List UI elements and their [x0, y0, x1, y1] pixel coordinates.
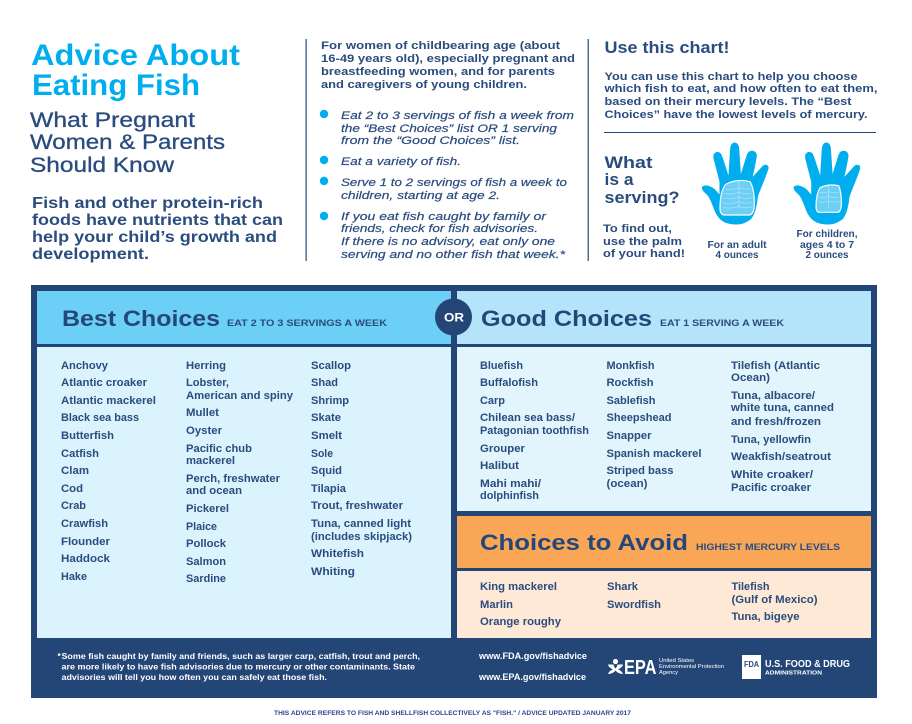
- list: best choices column 3: Smelt: [311, 430, 342, 442]
- list: best choices column 2: [186, 360, 293, 585]
- list: avoid column 1: Orange roughy: [480, 616, 561, 628]
- subheading: best choices frequency: EAT 2 TO 3 SERVINGS A WEEK: [227, 318, 387, 328]
- list: avoid column 2: [607, 581, 661, 611]
- intro paragraph: development.: [32, 246, 149, 263]
- list: best choices column 3: [311, 360, 412, 578]
- bullet: children: children, starting at age 2.: [341, 190, 500, 202]
- list: best choices column 3: Squid: [311, 465, 342, 477]
- list: best choices column 2: Sardine: [186, 573, 226, 585]
- subheading: mercury levels: HIGHEST MERCURY LEVELS: [696, 542, 840, 552]
- subheading: good choices frequency: EAT 1 SERVING A WEEK: [660, 318, 784, 328]
- list: best choices column 1: Flounder: [61, 536, 111, 548]
- bullet: servings per week: [320, 110, 574, 147]
- list: best choices column 3: Shad: [311, 377, 338, 389]
- bullet: family caught fish: serving and no other fish that week.*: [341, 249, 566, 261]
- panel: good choices: [457, 291, 871, 511]
- list: good choices column 1: Chilean sea bass/: [480, 412, 575, 424]
- title: Advice About: [31, 39, 240, 72]
- list: best choices column 1: Butterfish: [61, 430, 114, 442]
- list: best choices column 1: Crawfish: [61, 518, 108, 530]
- logo: EPA: [608, 656, 724, 679]
- list: best choices column 2: Perch, freshwater: [186, 473, 281, 485]
- list: best choices column 3: Sole: [311, 448, 333, 460]
- icon: or badge: [435, 298, 472, 336]
- list: good choices column 2: Monkfish: [606, 360, 654, 372]
- list: good choices column 3: and fresh/frozen: [731, 416, 821, 428]
- list: best choices column 2: Pollock: [186, 538, 227, 550]
- title block: [30, 39, 283, 263]
- list: avoid column 3: (Gulf of Mexico): [732, 594, 818, 606]
- caption: child serving: For children,: [796, 229, 858, 240]
- list: avoid column 2: Swordfish: [607, 599, 661, 611]
- list: good choices column 2: Rockfish: [606, 377, 654, 389]
- subtitle: Should Know: [30, 154, 175, 177]
- list: best choices column 3: Skate: [311, 412, 341, 424]
- logo: FDA: ADMINISTRATION: [765, 670, 822, 676]
- list: good choices column 1: Halibut: [480, 460, 519, 472]
- caption: adult serving: [708, 240, 767, 261]
- bullet: family caught fish: friends, check for fish advisories.: [341, 223, 538, 235]
- heading: what is a serving: serving?: [604, 188, 680, 207]
- list: best choices column 1: Black sea bass: [61, 412, 139, 424]
- caption: adult serving: For an adult: [708, 240, 767, 251]
- list: good choices column 1: Mahi mahi/: [480, 478, 541, 490]
- list: best choices column 3: Tilapia: [311, 483, 347, 495]
- intro paragraph: foods have nutrients that can: [32, 212, 283, 229]
- subtitle: What Pregnant: [30, 109, 195, 132]
- bullet: children: [320, 177, 567, 202]
- list: good choices column 3: Pacific croaker: [731, 482, 812, 494]
- list: best choices column 2: Plaice: [186, 521, 217, 533]
- bullet: variety: [320, 156, 461, 168]
- caption: adult serving: 4 ounces: [716, 250, 759, 261]
- list: best choices column 3: Tuna, canned light: [311, 518, 411, 530]
- list: good choices column 2: Striped bass: [606, 465, 674, 477]
- list: best choices column 3: Shrimp: [311, 395, 349, 407]
- audience text: [321, 40, 575, 91]
- list: good choices column 3: white tuna, canned: [730, 402, 834, 414]
- list: good choices column 1: Buffalofish: [480, 377, 538, 389]
- list: best choices column 2: Mullet: [186, 407, 219, 419]
- heading: what is a serving: is a: [604, 170, 634, 189]
- bullet: family caught fish: If there is no advisory, eat only one: [341, 236, 555, 248]
- palm instruction: use the palm: [603, 236, 682, 248]
- list: best choices column 1: Crab: [61, 500, 86, 512]
- panel: audience and advice: [320, 40, 575, 261]
- list: best choices column 2: Pacific chub: [186, 443, 252, 455]
- bullet: family caught fish: If you eat fish caught by family or: [341, 211, 547, 223]
- list: best choices column 2: Oyster: [186, 425, 223, 437]
- icon: adult hand: [703, 143, 768, 224]
- list: best choices column 2: Herring: [186, 360, 226, 372]
- heading: choices to avoid: Choices to Avoid: [480, 530, 688, 555]
- bullet: servings per week: Eat 2 to 3 servings of fish a week from: [341, 110, 574, 122]
- panel: choices to avoid: [457, 516, 871, 638]
- list: good choices column 1: dolphinfish: [480, 490, 539, 502]
- panel: fish chart frame: [31, 285, 877, 698]
- logo: EPA: United States: [659, 658, 694, 664]
- title: Eating Fish: [32, 69, 200, 102]
- website links: [478, 651, 587, 682]
- heading: good choices: Good Choices: [481, 306, 652, 331]
- subtitle: [30, 109, 225, 177]
- list: best choices column 1: Catfish: [61, 448, 99, 460]
- chart description: Choices” have the lowest levels of mercury.: [604, 109, 868, 121]
- list: avoid column 3: Tilefish: [732, 581, 770, 593]
- list: good choices column 3: Weakfish/seatrout: [731, 451, 831, 463]
- audience text: and caregivers of young children.: [321, 79, 527, 91]
- heading: use this chart: Use this chart!: [604, 39, 730, 57]
- caption: child serving: ages 4 to 7: [800, 240, 855, 251]
- footnote: are more likely to have fish advisories due to mercury or other contaminants. State: [62, 662, 415, 672]
- palm instruction: [603, 223, 685, 260]
- list: best choices column 2: and ocean: [186, 485, 242, 497]
- panel: best choices: [37, 291, 451, 638]
- footnote: Some fish caught by family and friends, such as larger carp, catfish, trout and perch,: [62, 651, 420, 661]
- list: best choices column 1: Cod: [61, 483, 83, 495]
- bullet: servings per week: the “Best Choices” list OR 1 serving: [341, 123, 558, 135]
- list: good choices column 2: Sablefish: [606, 395, 656, 407]
- caption: child serving: [796, 229, 858, 261]
- audience text: For women of childbearing age (about: [321, 40, 560, 52]
- chart description: You can use this chart to help you choose: [604, 71, 858, 83]
- bullet: children: Serve 1 to 2 servings of fish a week to: [341, 177, 567, 189]
- logo: EPA: Environmental Protection: [659, 664, 724, 670]
- footnote: *: [58, 651, 62, 661]
- list: good choices column 3: Tuna, yellowfin: [731, 434, 811, 446]
- footnote: [58, 651, 420, 682]
- list: best choices column 3: Scallop: [311, 360, 351, 372]
- intro paragraph: [32, 195, 283, 263]
- list: avoid column 3: [732, 581, 818, 623]
- list: good choices column 2: Spanish mackerel: [606, 448, 702, 460]
- list: best choices column 3: Trout, freshwater: [311, 500, 404, 512]
- logo: FDA: U.S. FOOD & DRUG: [765, 658, 850, 670]
- icon: or badge: OR: [444, 310, 464, 324]
- list: good choices column 1: [480, 360, 589, 502]
- chart description: based on their mercury levels. The “Best: [604, 96, 852, 108]
- list: avoid column 1: King mackerel: [480, 581, 557, 593]
- heading: what is a serving: [604, 153, 680, 207]
- list: best choices column 3: Whitefish: [311, 548, 364, 560]
- list: good choices column 1: Grouper: [480, 443, 526, 455]
- heading: what is a serving: What: [604, 153, 653, 172]
- website links: www.EPA.gov/fishadvice: [478, 672, 586, 682]
- list: good choices column 2: [606, 360, 702, 490]
- list: good choices column 2: Snapper: [606, 430, 652, 442]
- intro paragraph: Fish and other protein-rich: [32, 195, 263, 212]
- list: best choices column 1: [61, 360, 156, 583]
- logo: FDA: [742, 655, 850, 679]
- logo: FDA: FDA: [744, 660, 759, 669]
- list: best choices column 1: Hake: [61, 571, 87, 583]
- list: good choices column 3: Tuna, albacore/: [731, 390, 815, 402]
- intro paragraph: help your child’s growth and: [32, 229, 277, 246]
- list: best choices column 2: Lobster,: [186, 377, 229, 389]
- list: best choices column 3: (includes skipjack): [311, 531, 412, 543]
- list: best choices column 3: Whiting: [311, 566, 355, 578]
- list: best choices column 2: Salmon: [186, 556, 226, 568]
- list: good choices column 1: Carp: [480, 395, 505, 407]
- caption: child serving: 2 ounces: [806, 250, 849, 261]
- list: best choices column 2: mackerel: [186, 455, 235, 467]
- bullet: variety: Eat a variety of fish.: [341, 156, 461, 168]
- logo: EPA: Agency: [659, 670, 678, 676]
- heading: best choices: Best Choices: [62, 306, 220, 331]
- audience text: 16-49 years old), especially pregnant and: [321, 53, 575, 65]
- list: avoid column 2: Shark: [607, 581, 639, 593]
- list: good choices column 1: Bluefish: [480, 360, 523, 372]
- bullet: family caught fish: [320, 211, 566, 261]
- logo: EPA: EPA: [624, 656, 657, 679]
- list: good choices column 3: Ocean): [731, 372, 770, 384]
- subtitle: Women & Parents: [30, 131, 225, 154]
- icon: child hand: [794, 143, 859, 224]
- list: avoid column 1: Marlin: [480, 599, 513, 611]
- list: best choices column 1: Atlantic mackerel: [61, 395, 156, 407]
- list: best choices column 1: Anchovy: [61, 360, 108, 372]
- bullet: servings per week: from the “Good Choices” list.: [341, 135, 520, 147]
- palm instruction: of your hand!: [603, 248, 685, 260]
- audience text: breastfeeding women, and for parents: [321, 66, 555, 78]
- list: best choices column 2: American and spiny: [186, 390, 293, 402]
- website links: www.FDA.gov/fishadvice: [478, 651, 587, 661]
- list: best choices column 1: Clam: [61, 465, 89, 477]
- list: good choices column 3: White croaker/: [731, 469, 813, 481]
- title: [31, 39, 240, 102]
- chart description: which fish to eat, and how often to eat them,: [603, 83, 878, 95]
- bottom note: THIS ADVICE REFERS TO FISH AND SHELLFISH COLLECTIVELY AS "FISH." / ADVICE UPDATED JANUARY 2017: [274, 710, 631, 717]
- list: best choices column 1: Haddock: [61, 553, 111, 565]
- palm instruction: To find out,: [603, 223, 672, 235]
- list: avoid column 1: [480, 581, 561, 628]
- panel: use this chart: [603, 39, 878, 261]
- list: good choices column 3: Tilefish (Atlantic: [731, 360, 820, 372]
- list: best choices column 2: Pickerel: [186, 503, 229, 515]
- list: good choices column 2: Sheepshead: [606, 412, 672, 424]
- footnote: advisories will tell you how often you can safely eat those fish.: [62, 672, 327, 682]
- list: good choices column 2: (ocean): [606, 478, 648, 490]
- list: good choices column 1: Patagonian toothfish: [480, 425, 589, 437]
- list: good choices column 3: [730, 360, 834, 494]
- chart description: [603, 71, 878, 121]
- list: best choices column 1: Atlantic croaker: [61, 377, 148, 389]
- list: avoid column 3: Tuna, bigeye: [732, 611, 800, 623]
